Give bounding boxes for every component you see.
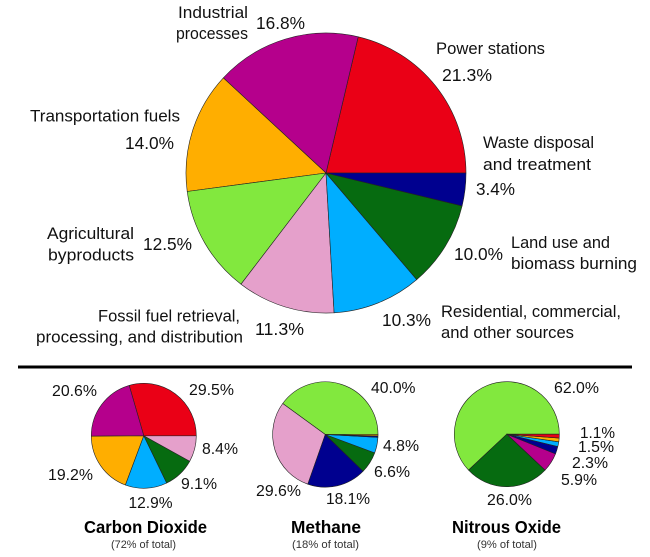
panel: nitrous oxide: [452, 380, 615, 551]
divider line: [18, 366, 632, 368]
label: fossil fuel: processing, and distribution: [36, 328, 243, 347]
slice: land use and biomass burning: [326, 173, 462, 280]
label: fossil fuel: Fossil fuel retrieval,: [98, 307, 240, 326]
label: land use: Land use and: [511, 233, 610, 252]
values: carbon dioxide: 8.4%: [202, 441, 238, 458]
slice: residential, commercial: [326, 173, 417, 313]
values: nitrous oxide: 2.3%: [572, 455, 608, 472]
values: methane: [256, 380, 419, 508]
values: nitrous oxide: 1.5%: [578, 439, 614, 456]
label: agricultural: byproducts: [48, 246, 134, 265]
panel: methane: [256, 380, 419, 551]
values: carbon dioxide: 29.5%: [189, 382, 234, 399]
heading: methane: Methane: [291, 517, 361, 537]
label: waste disposal: Waste disposal: [483, 133, 594, 152]
value: fossil fuel: 11.3%: [255, 319, 304, 339]
values: carbon dioxide: [48, 382, 238, 512]
label: waste disposal: and treatment: [483, 155, 591, 174]
slice: agricultural byproducts: [187, 173, 326, 284]
value: agricultural: 12.5%: [143, 234, 192, 254]
value: industrial processes: 16.8%: [256, 13, 305, 33]
values: methane: 6.6%: [374, 464, 410, 481]
values: carbon dioxide: 12.9%: [128, 495, 172, 512]
slice: waste disposal: [326, 173, 466, 206]
value: land use: 10.0%: [454, 244, 503, 264]
value: transportation: 14.0%: [125, 133, 174, 153]
label: industrial processes: Industrial: [178, 3, 248, 22]
values: methane: 29.6%: [256, 483, 301, 500]
values: carbon dioxide: 19.2%: [48, 467, 93, 484]
main pie labels: [30, 3, 637, 347]
label: residential: and other sources: [441, 323, 574, 342]
slice: fossil fuel retrieval: [241, 173, 334, 313]
label: industrial processes: processes: [176, 24, 248, 43]
label: agricultural: Agricultural: [47, 224, 134, 243]
main pie chart: all emissions by sector: [186, 33, 466, 313]
panel: carbon dioxide: [48, 382, 238, 551]
slice: industrial processes: [223, 33, 358, 173]
pie: carbon dioxide: [91, 383, 196, 488]
values: nitrous oxide: 5.9%: [561, 472, 597, 489]
label: power stations: Power stations: [436, 39, 545, 58]
values: nitrous oxide: 1.1%: [580, 425, 615, 442]
pie: nitrous oxide: [454, 382, 559, 487]
value: residential: 10.3%: [382, 310, 431, 330]
values: methane: 18.1%: [326, 491, 370, 508]
heading: carbon dioxide: Carbon Dioxide: [84, 517, 207, 537]
note: share of total: (9% of total): [477, 539, 537, 551]
values: carbon dioxide: 20.6%: [52, 383, 97, 400]
note: share of total: (72% of total): [111, 539, 176, 551]
values: nitrous oxide: 62.0%: [554, 380, 599, 397]
values: nitrous oxide: 26.0%: [487, 492, 532, 509]
slice: transportation fuels: [186, 78, 326, 192]
label: land use: biomass burning: [511, 254, 637, 273]
values: methane: 4.8%: [383, 438, 419, 455]
note: share of total: (18% of total): [292, 539, 359, 551]
values: carbon dioxide: 9.1%: [181, 476, 217, 493]
pie: methane: [273, 382, 378, 487]
slice: power stations: [326, 37, 466, 173]
value: waste disposal: 3.4%: [476, 179, 515, 199]
heading: nitrous oxide: Nitrous Oxide: [452, 517, 561, 537]
label: transportation: Transportation fuels: [30, 107, 180, 126]
values: methane: 40.0%: [371, 380, 416, 397]
value: power stations: 21.3%: [442, 65, 492, 85]
label: residential: Residential, commercial,: [441, 302, 621, 321]
values: nitrous oxide: [487, 380, 615, 509]
